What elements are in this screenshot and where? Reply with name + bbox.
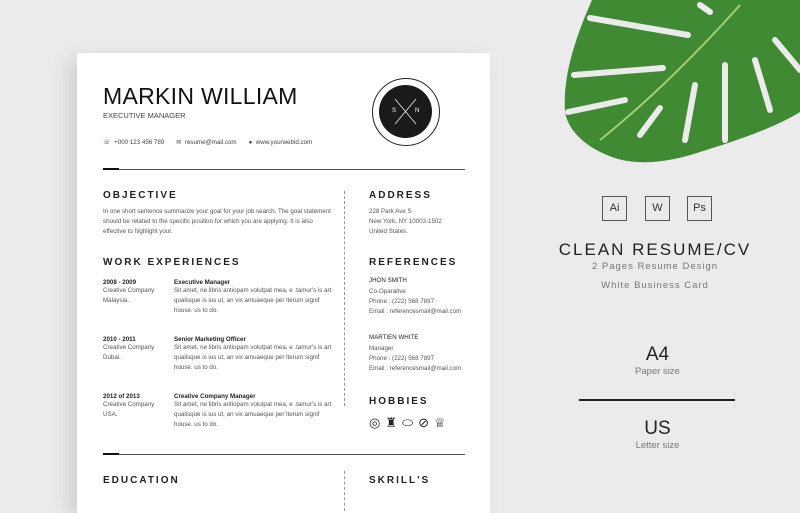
resume paper <box>77 53 490 513</box>
work experiences section: WORK EXPERIENCES <box>103 257 241 268</box>
references section: Email : referencesmail@mail.com <box>369 308 461 315</box>
leaf decoration <box>564 0 800 162</box>
objective section <box>103 190 331 235</box>
product title: CLEAN RESUME/CV <box>559 240 751 259</box>
address section <box>369 190 442 235</box>
references section: Phone : (222) 568 7897 <box>369 298 434 305</box>
references section: JHON SMITH <box>369 277 407 284</box>
objective section: OBJECTIVE <box>103 190 178 201</box>
hobbies section: HOBBIES <box>369 396 429 407</box>
address section: ADDRESS <box>369 190 432 201</box>
A4 size: Paper size <box>635 366 680 377</box>
product title: White Business Card <box>601 280 709 291</box>
software icons <box>602 196 712 221</box>
references section: REFERENCES <box>369 257 457 268</box>
vertical dotted divider <box>344 191 345 406</box>
references section <box>369 257 461 372</box>
resume paper: Creative Company <box>103 401 154 408</box>
A4 size: A4 <box>646 344 669 365</box>
US size: Letter size <box>636 440 679 451</box>
resume paper: 2008 - 2009 <box>103 279 136 286</box>
product title <box>559 240 751 291</box>
resume paper: Creative Company Manager <box>174 393 256 400</box>
objective section: In one short sentence summarize your goal for your job search. The goal statement should be related to the specific position for which you are applying. It is also effective to highlight your. <box>103 208 331 235</box>
US size <box>636 418 679 451</box>
address section: United States. <box>369 228 408 235</box>
monogram logo: S <box>392 108 396 114</box>
job title: EXECUTIVE MANAGER <box>103 111 186 120</box>
product title: 2 Pages Resume Design <box>592 261 718 272</box>
references section: Email : referencesmail@mail.com <box>369 365 461 372</box>
resume paper: Creative Company <box>103 344 154 351</box>
hobbies section <box>369 396 451 430</box>
resume paper: Executive Manager <box>174 279 230 286</box>
monogram logo: N <box>415 108 419 114</box>
separator line <box>579 399 735 400</box>
name heading: MARKIN WILLIAM <box>103 83 298 109</box>
references section: Phone : (222) 568 7897 <box>369 355 434 362</box>
resume paper: Sit amet, ne libris antiopam volutpat mea, e .tamur's is art qualisque is ius ut, an vix amuaeque per lterum signif house. us to do. <box>174 287 331 314</box>
A4 size <box>635 344 680 377</box>
education heading: EDUCATION <box>103 475 180 486</box>
resume paper: Sit amet, ne libris antiopam volutpat mea, e .tamur's is art qualisque is ius ut, an vix amuaeque per lterum signif house. us to do. <box>174 401 331 428</box>
hobby icons: ◎♜⬭⊘♕ <box>369 415 451 430</box>
software icons: W <box>652 202 663 214</box>
resume paper: 2012 of 2013 <box>103 393 140 400</box>
resume paper: Creative Company <box>103 287 154 294</box>
software icons: Ai <box>610 202 619 214</box>
divider 2 <box>103 454 465 455</box>
contact row: ☏ +000 123 456 789 ✉ resume@mail.com ● www.yourwebid.com <box>103 139 312 146</box>
resume paper: 2010 - 2011 <box>103 336 136 343</box>
references section: Co-Oparative <box>369 288 406 295</box>
address section: 228 Park Ave S <box>369 208 412 215</box>
resume paper: Senior Marketing Officer <box>174 336 246 343</box>
resume paper: Dubai. <box>103 354 121 361</box>
skills heading: SKRILL'S <box>369 475 430 486</box>
references section: Manager <box>369 345 393 352</box>
resume paper: Sit amet, ne libris antiopam volutpat mea, e .tamur's is art qualisque is ius ut, an vix amuaeque per lterum signif house. us to do. <box>174 344 331 371</box>
work experiences section <box>103 257 332 428</box>
monogram logo <box>372 78 440 146</box>
address section: New York, NY 10003-1502 <box>369 218 442 225</box>
resume paper: Malaysia. <box>103 297 129 304</box>
references section: MARTIEN WHITE <box>369 334 418 341</box>
resume paper: USA. <box>103 411 117 418</box>
software icons: Ps <box>693 202 706 214</box>
divider <box>103 169 465 170</box>
US size: US <box>644 418 671 439</box>
